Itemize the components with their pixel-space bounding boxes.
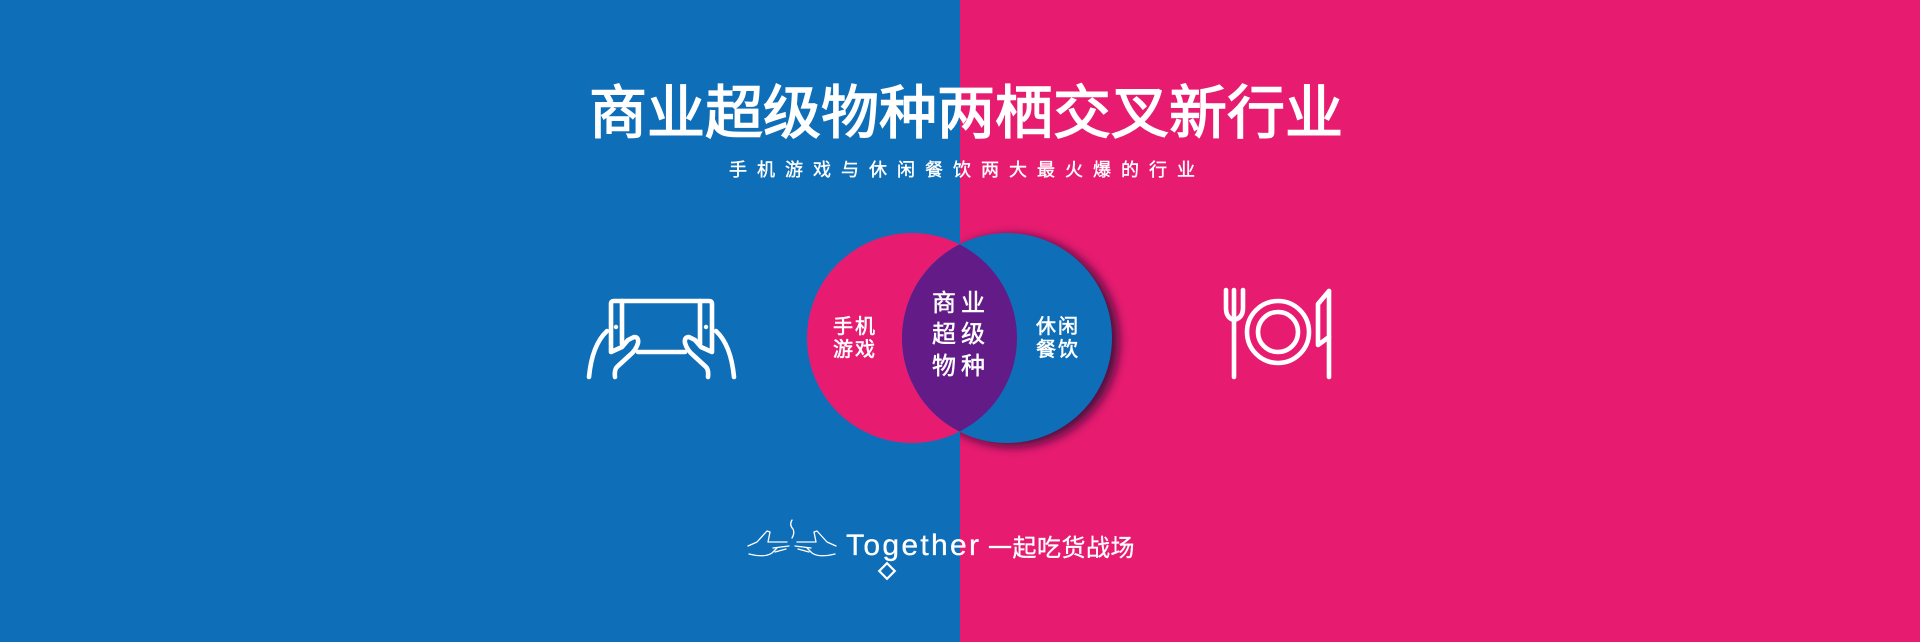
- label: casual dining: 餐饮: [1036, 338, 1080, 361]
- panel: pink right background: [960, 0, 1920, 642]
- label: business super species: 物种: [932, 353, 990, 380]
- title: 商业超级物种两栖交叉新行业: [589, 81, 1343, 146]
- chart: venn diagram: [807, 233, 1119, 447]
- label: mobile games: 手机: [833, 315, 877, 338]
- circle: mobile games: [807, 233, 1017, 443]
- subtitle: 手机游戏与休闲餐饮两大最火爆的行业: [729, 160, 1205, 180]
- label: business super species: 商业: [932, 290, 990, 317]
- slogan: 一起吃货战场: [988, 535, 1135, 562]
- label: casual dining: 休闲: [1036, 315, 1080, 338]
- shadow of right circle: [960, 226, 1128, 456]
- icon: plate with fork and knife: [1226, 290, 1329, 377]
- icon: pointing hands with smoke: [748, 520, 836, 556]
- circle: casual dining: [902, 233, 1112, 443]
- icon: diamond descender of the g: [879, 563, 895, 579]
- wordmark: Together: [846, 529, 979, 562]
- logo: Together: [748, 520, 1135, 579]
- label: business super species: 超级: [932, 321, 990, 348]
- icon: hands holding tablet: [589, 301, 734, 377]
- infographic canvas: [586, 0, 1920, 642]
- panel: blue left background: [0, 0, 960, 642]
- overlap: business super species: [902, 244, 1017, 432]
- label: mobile games: 游戏: [833, 338, 877, 361]
